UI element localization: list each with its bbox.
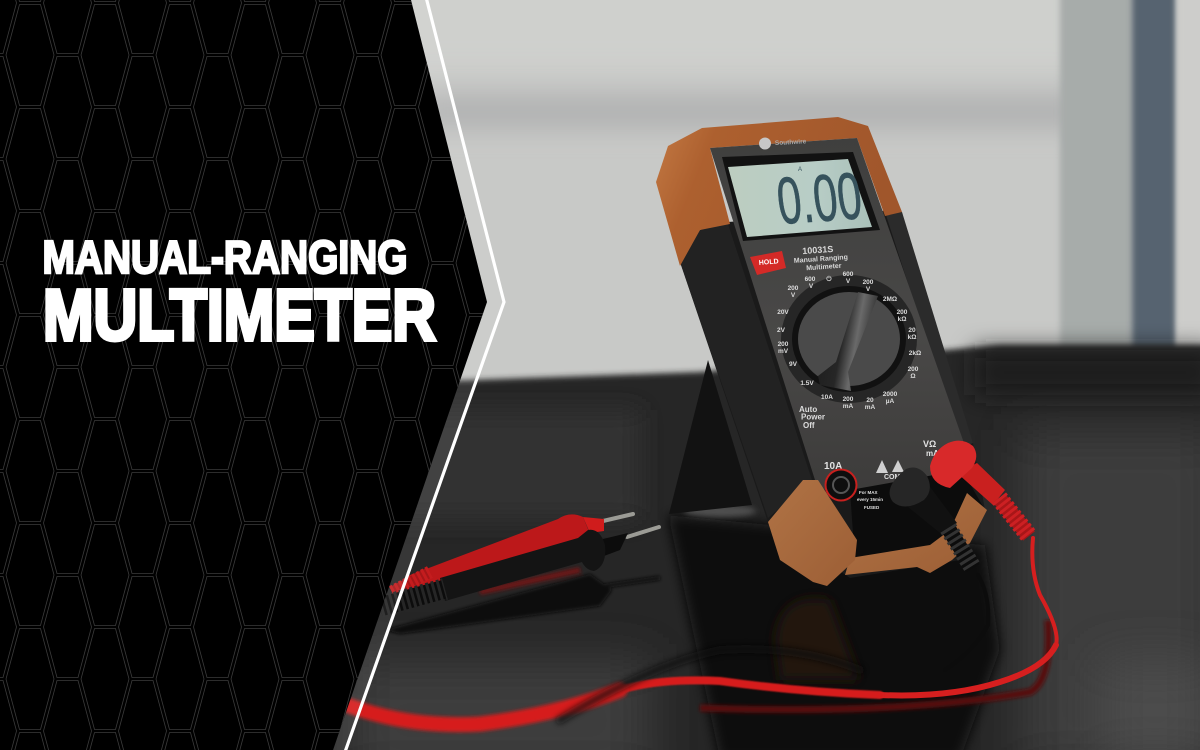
dial labels: V [791, 292, 796, 299]
rotary dial [792, 286, 906, 392]
orange left bumper [768, 480, 857, 586]
dial labels: 600 [805, 276, 816, 283]
black lying probe [380, 527, 659, 607]
dial labels: 2MΩ [883, 296, 897, 303]
dial labels: 10A [821, 394, 833, 401]
dial labels: ⏻ [826, 275, 832, 283]
dial labels: 20V [777, 309, 789, 316]
dial labels: Ω [910, 373, 916, 380]
model label [794, 244, 848, 272]
orange right bumper [845, 493, 987, 575]
auto power off label: Power [801, 412, 825, 422]
hold button: HOLD [759, 258, 779, 267]
red lying probe [392, 514, 633, 592]
dial labels: V [809, 283, 814, 290]
black test lead wire [560, 575, 988, 720]
dial labels: 200 [863, 279, 874, 286]
red probe plug [930, 441, 1029, 536]
jack labels: every 15min [857, 497, 883, 502]
title line two: MULTIMETER [43, 275, 436, 356]
black probe plug [890, 468, 973, 568]
lcd reading [773, 159, 866, 239]
title [42, 231, 436, 356]
translucent band beside white line [333, 0, 505, 750]
multimeter [656, 117, 987, 586]
white chevron line [345, 0, 504, 750]
jack labels: For MAX [859, 490, 878, 495]
dial labels: 2kΩ [909, 350, 921, 357]
dial labels: 20 [866, 397, 874, 404]
auto power off label: Auto [799, 405, 817, 414]
kickstand [669, 360, 752, 514]
blurred back wall [0, 0, 1200, 400]
display bezel [722, 152, 880, 241]
dial labels: mV [778, 348, 789, 355]
logo [759, 138, 807, 150]
auto power off label [799, 405, 825, 430]
dial pointer knob [818, 292, 878, 391]
dial labels: mA [865, 404, 876, 411]
model label: Multimeter [806, 263, 842, 272]
warning triangles [876, 460, 904, 473]
probe reflections [385, 570, 1049, 710]
black lower section [850, 470, 985, 562]
dial labels: mA [843, 403, 854, 410]
lcd reading: A [798, 167, 802, 173]
red test lead wire [350, 538, 1057, 725]
dial labels: kΩ [898, 316, 906, 323]
dial labels [777, 271, 921, 411]
jack labels: COM [884, 474, 900, 481]
black body [680, 210, 985, 578]
left rubber grip [680, 224, 812, 518]
dial labels: 200 [788, 285, 799, 292]
dial labels: V [846, 278, 851, 285]
dial labels: kΩ [908, 334, 916, 341]
dial centre [798, 292, 900, 386]
black title panel [0, 0, 487, 750]
title line one: MANUAL-RANGING [42, 231, 408, 283]
dial labels: 2V [777, 327, 786, 334]
dial labels: 1.5V [800, 380, 814, 387]
dial scale ring [781, 275, 917, 403]
dial labels: 20 [908, 327, 916, 334]
model label: 10031S [802, 244, 834, 256]
10A jack [824, 468, 858, 502]
jack labels: VΩ [923, 439, 936, 449]
jack labels: 10A [824, 461, 842, 472]
dial labels: V [866, 286, 871, 293]
dial labels: 200 [897, 309, 908, 316]
dial labels: 200 [778, 341, 789, 348]
glossy black table [330, 345, 1200, 750]
right grip [885, 212, 973, 448]
dial labels: 200 [843, 396, 854, 403]
dial labels: 600 [843, 271, 854, 278]
logo: Southwire [775, 138, 807, 147]
lcd reading: 0.00 [773, 159, 866, 239]
jack labels: FUSED [864, 505, 880, 510]
auto power off label: Off [803, 421, 815, 430]
face plate [710, 138, 965, 500]
jack labels [824, 439, 939, 510]
orange top cap [656, 117, 902, 266]
dial labels: 200 [908, 366, 919, 373]
dial labels: 2000 [883, 391, 898, 398]
jack labels: mA [926, 449, 939, 458]
lcd screen [728, 159, 872, 237]
meter reflection on table [668, 505, 1000, 750]
dial labels: µA [886, 398, 895, 405]
dial labels: 9V [789, 361, 798, 368]
model label: Manual Ranging [794, 254, 848, 265]
hold button [750, 251, 786, 275]
